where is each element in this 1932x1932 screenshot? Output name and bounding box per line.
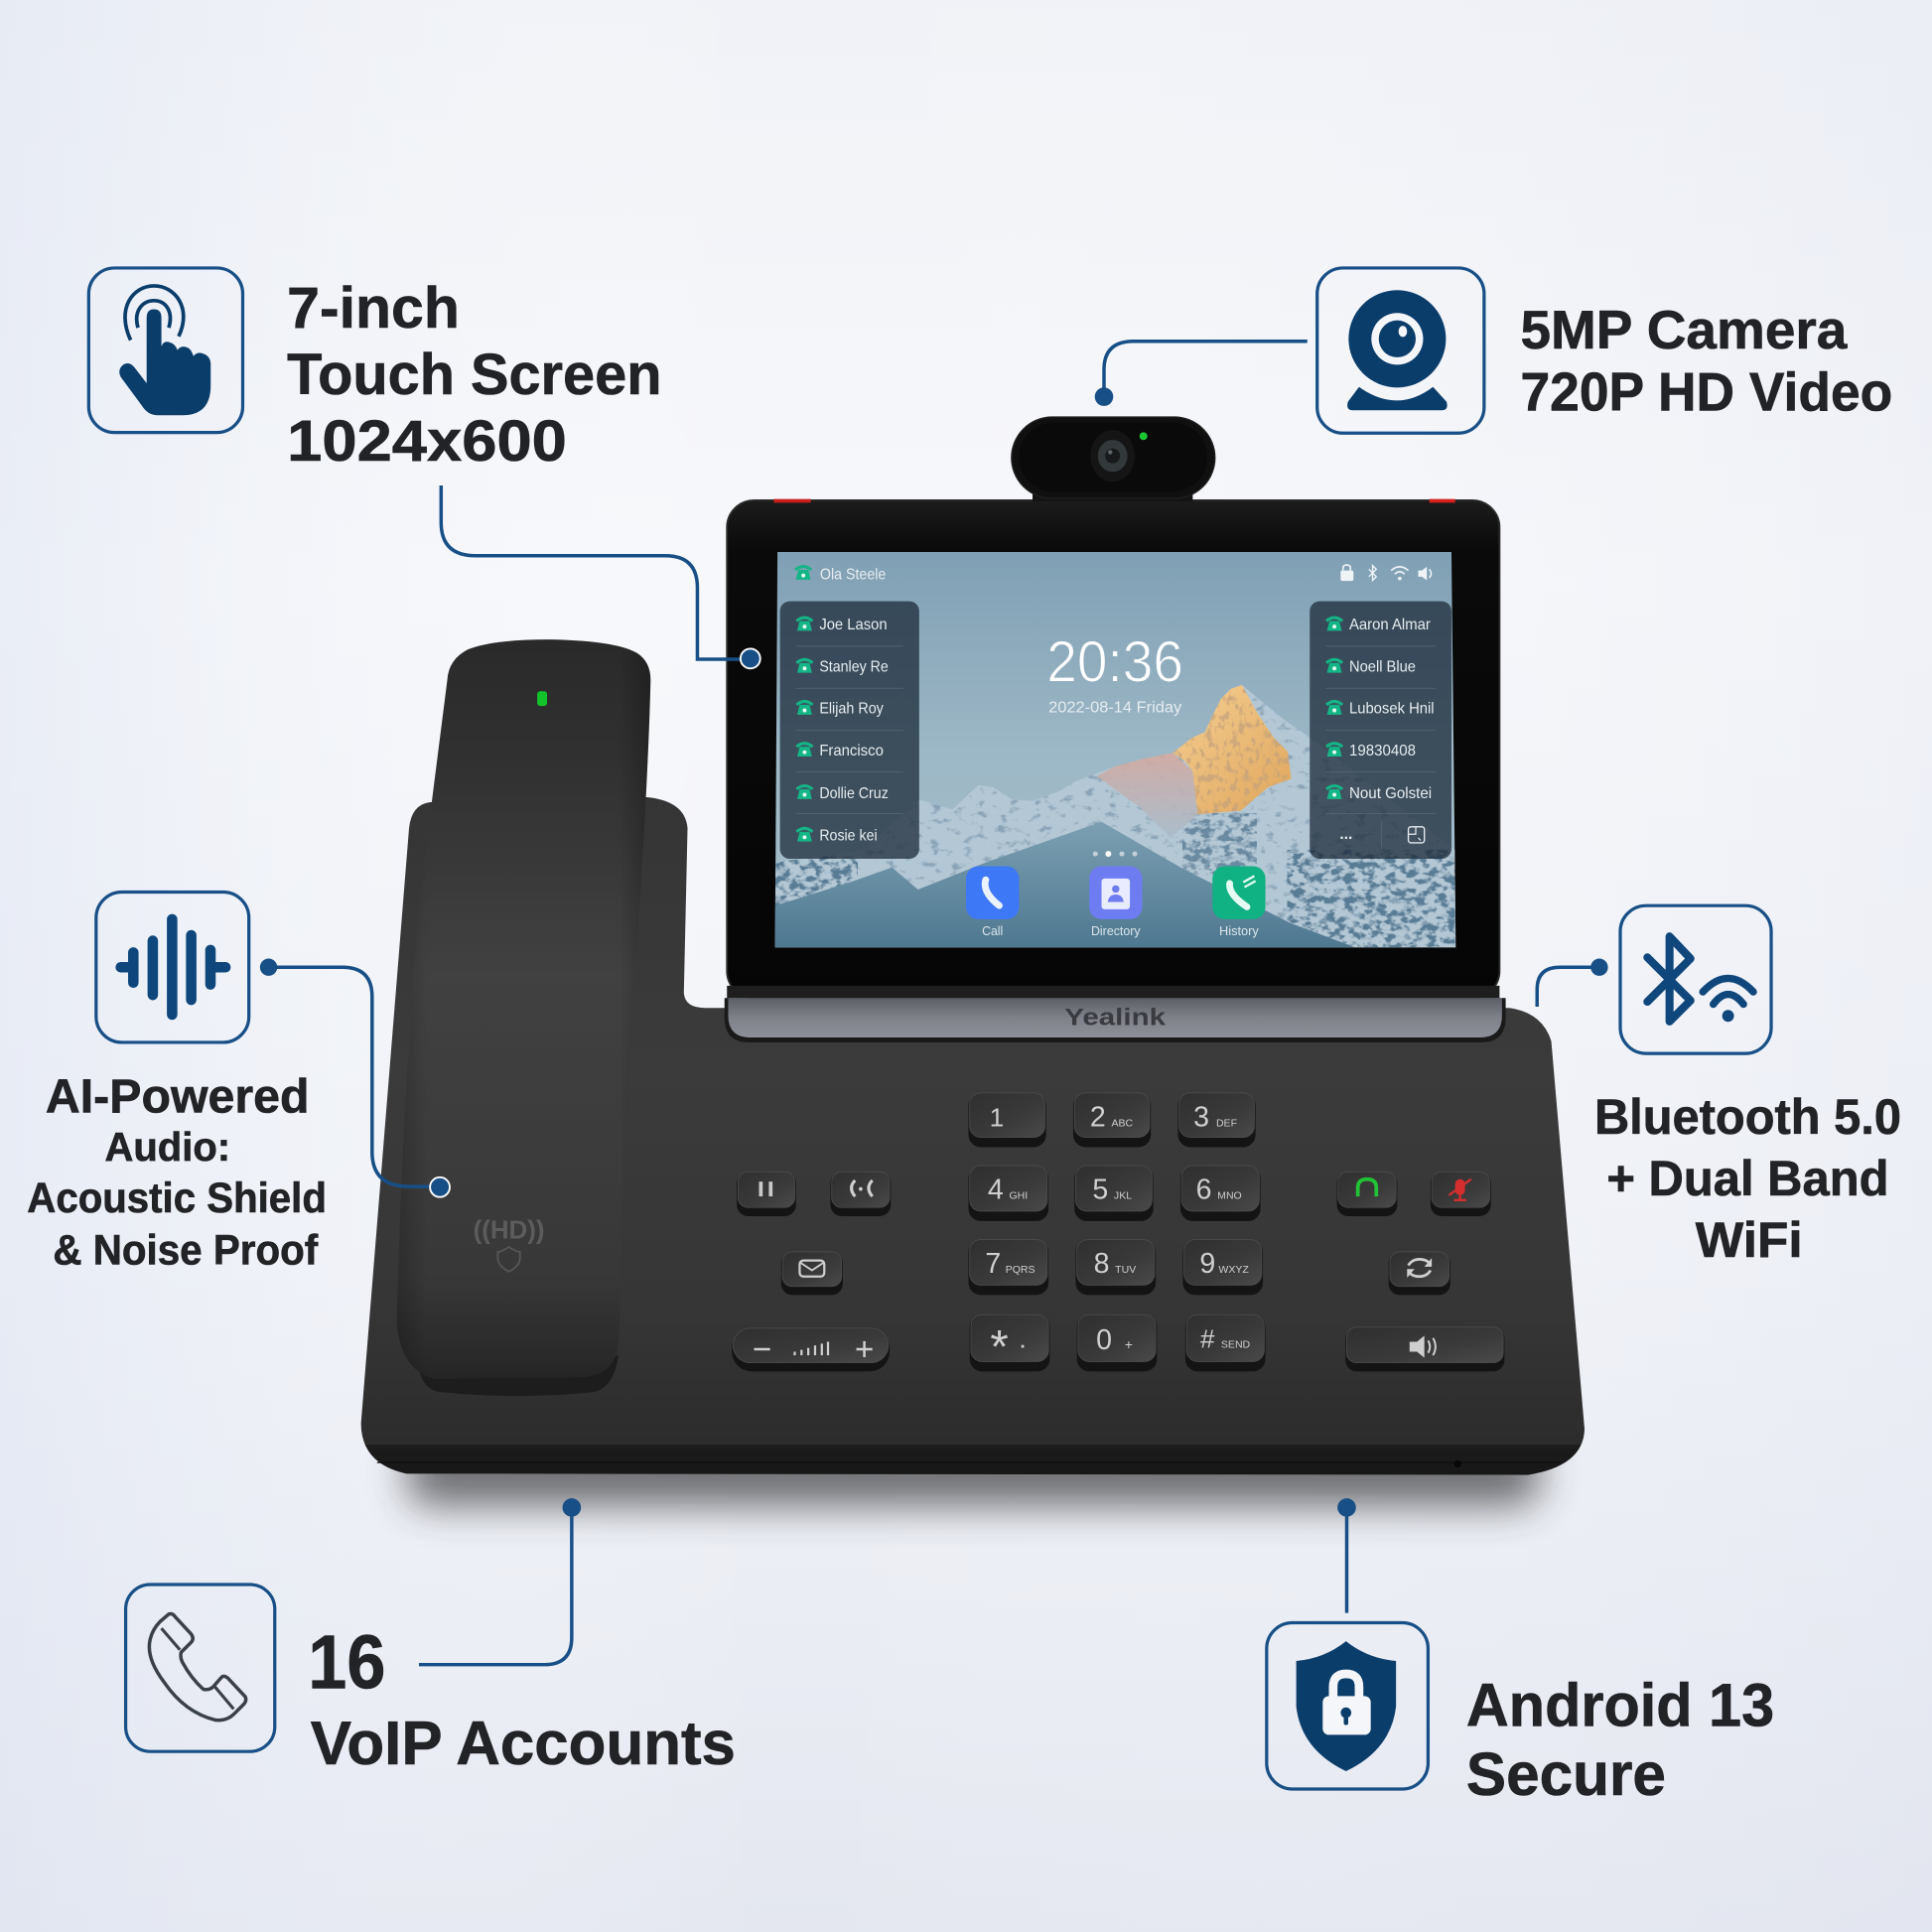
icon: bluetooth and wifi: [1620, 905, 1771, 1053]
panel: right contacts: Noell Blue: [1349, 658, 1416, 675]
heading: touch screen: 7-inch: [287, 276, 460, 341]
phone: base unit: [361, 797, 1585, 1475]
phone: touch screen: [770, 548, 1460, 952]
app icon: directory: Directory: [1091, 923, 1141, 938]
key 9: [1182, 1240, 1263, 1295]
panel: left contacts: [780, 602, 919, 859]
heading: security: Android 13: [1466, 1672, 1774, 1739]
icon: sound wave: [96, 893, 249, 1042]
heading: wireless: + Dual Band: [1606, 1151, 1889, 1206]
heading: touch screen: 1024x600: [287, 409, 567, 474]
key 4: [968, 1166, 1048, 1221]
heading: audio: & Noise Proof: [53, 1226, 319, 1273]
connector: audio: [260, 959, 450, 1197]
key hash: #: [1200, 1324, 1215, 1354]
heading: touch screen: [287, 276, 661, 474]
key 6: [1180, 1166, 1261, 1221]
icon: shield lock: [1267, 1622, 1428, 1789]
webcam lens: [1090, 430, 1135, 482]
handset HD mark: ((HD)): [474, 1214, 545, 1244]
app icon: call: Call: [982, 923, 1003, 938]
key: headset: [1337, 1172, 1397, 1216]
panel: right contacts: [1310, 602, 1451, 859]
key star: *: [990, 1320, 1009, 1373]
panel: left contacts: Dollie Cruz: [819, 785, 889, 802]
key 4: 4: [988, 1174, 1004, 1206]
heading: audio: AI-Powered: [46, 1070, 310, 1124]
key 5: 5: [1092, 1174, 1108, 1206]
feature: accounts: [126, 1585, 736, 1778]
key 1: 1: [990, 1102, 1004, 1132]
key 2: ABC: [1111, 1117, 1133, 1129]
heading: audio: Audio:: [104, 1124, 230, 1170]
key 4: GHI: [1009, 1190, 1028, 1202]
key 1: [968, 1093, 1046, 1147]
panel: right contacts: 19830408: [1349, 743, 1416, 759]
heading: camera: 5MP Camera: [1520, 300, 1848, 360]
icon: handset status LED: [537, 691, 547, 706]
heading: accounts: 16: [308, 1619, 385, 1705]
key 8: [1075, 1240, 1156, 1295]
connector: accounts: [419, 1498, 581, 1665]
feature: security: [1267, 1622, 1774, 1808]
heading: wireless: WiFi: [1696, 1212, 1803, 1268]
heading: camera: [1520, 300, 1892, 422]
panel: left contacts: Rosie kei: [819, 827, 878, 844]
heading: security: Secure: [1466, 1740, 1666, 1808]
panel: right contacts: Lubosek Hnil: [1349, 701, 1435, 718]
heading: accounts: [308, 1619, 736, 1778]
key 7: PQRS: [1006, 1264, 1035, 1276]
heading: wireless: [1594, 1089, 1901, 1268]
heading: touch screen: Touch Screen: [287, 343, 661, 407]
key: redial: [1389, 1252, 1450, 1295]
key 8: 8: [1094, 1248, 1109, 1280]
panel: left contacts: Stanley Re: [819, 658, 889, 675]
key: message: [781, 1252, 843, 1295]
icon: touch hand: [88, 268, 242, 433]
status bar: Ola Steele: [820, 566, 886, 583]
feature: camera: [1317, 268, 1892, 433]
panel: left contacts: Elijah Roy: [819, 701, 884, 718]
key: volume rocker: [732, 1328, 890, 1371]
connector: camera: [1095, 342, 1308, 406]
key 2: [1073, 1093, 1151, 1147]
panel: right contacts: ...: [1339, 826, 1352, 843]
heading: security: [1466, 1672, 1774, 1808]
heading: accounts: VoIP Accounts: [311, 1710, 736, 1778]
icon: webcam: [1317, 268, 1484, 433]
panel: right contacts: Nout Golstei: [1349, 785, 1432, 802]
connector: wireless: [1537, 959, 1608, 1007]
feature: touch screen: [88, 268, 661, 474]
key 0: +: [1125, 1337, 1133, 1352]
feature: audio: [27, 893, 327, 1273]
screen wallpaper: mountain: [770, 548, 1460, 952]
key 3: DEF: [1216, 1117, 1238, 1129]
key star: [970, 1314, 1049, 1373]
key 6: 6: [1196, 1174, 1211, 1206]
phone: handset: [397, 639, 650, 1396]
key hash: SEND: [1221, 1339, 1251, 1351]
key 2: 2: [1090, 1101, 1106, 1133]
connector: touch screen: [441, 485, 760, 668]
function keys right: [1337, 1172, 1504, 1371]
key hash: [1185, 1314, 1266, 1371]
key 3: 3: [1193, 1101, 1209, 1133]
phone: desk shadow: [407, 1442, 1540, 1506]
brand name: Yealink: [1064, 1005, 1167, 1032]
icon: handset shield mark: [497, 1247, 520, 1272]
phone: display bezel: [727, 499, 1499, 998]
webcam LED: [1140, 432, 1148, 440]
heading: audio: Acoustic Shield: [27, 1174, 327, 1221]
key 9: 9: [1199, 1248, 1215, 1280]
heading: audio: [27, 1070, 327, 1273]
panel: right contacts: Aaron Almar: [1349, 617, 1431, 633]
status icons: [1340, 565, 1432, 581]
key 7: 7: [985, 1248, 1001, 1280]
key 6: MNO: [1217, 1190, 1242, 1202]
status bar: [795, 565, 1432, 583]
key 8: TUV: [1115, 1264, 1136, 1276]
key star: .: [1021, 1331, 1026, 1352]
key: speaker: [1345, 1327, 1504, 1371]
page dots: [1093, 851, 1138, 857]
feature: wireless: [1594, 905, 1901, 1268]
connector: security: [1337, 1498, 1356, 1613]
app icon: history: [1212, 866, 1266, 938]
key 5: [1074, 1166, 1154, 1221]
key 0: 0: [1096, 1324, 1112, 1356]
heading: camera: 720P HD Video: [1520, 361, 1892, 422]
heading: wireless: Bluetooth 5.0: [1594, 1089, 1901, 1145]
key 0: [1077, 1314, 1157, 1371]
clock: 20:36: [1046, 629, 1183, 694]
panel: left contacts: Francisco: [819, 743, 884, 759]
key 3: [1177, 1093, 1256, 1147]
keypad: [968, 1093, 1266, 1373]
key: hold: [737, 1172, 796, 1216]
app icon: history: History: [1219, 923, 1259, 938]
panel: left contacts: Joe Lason: [819, 617, 888, 633]
key: mute: [1431, 1172, 1491, 1216]
app icon: call: [966, 866, 1019, 938]
key 7: [968, 1240, 1048, 1295]
function keys left: [732, 1172, 891, 1371]
key 9: WXYZ: [1218, 1264, 1249, 1276]
key 5: JKL: [1114, 1190, 1132, 1202]
phone: webcam: [1012, 417, 1215, 501]
key: transfer: [830, 1172, 891, 1216]
icon: phone receiver: [126, 1585, 275, 1751]
phone: metal hinge strip: [725, 998, 1506, 1042]
date: 2022-08-14 Friday: [1048, 698, 1182, 716]
app icon: directory: [1089, 866, 1142, 938]
